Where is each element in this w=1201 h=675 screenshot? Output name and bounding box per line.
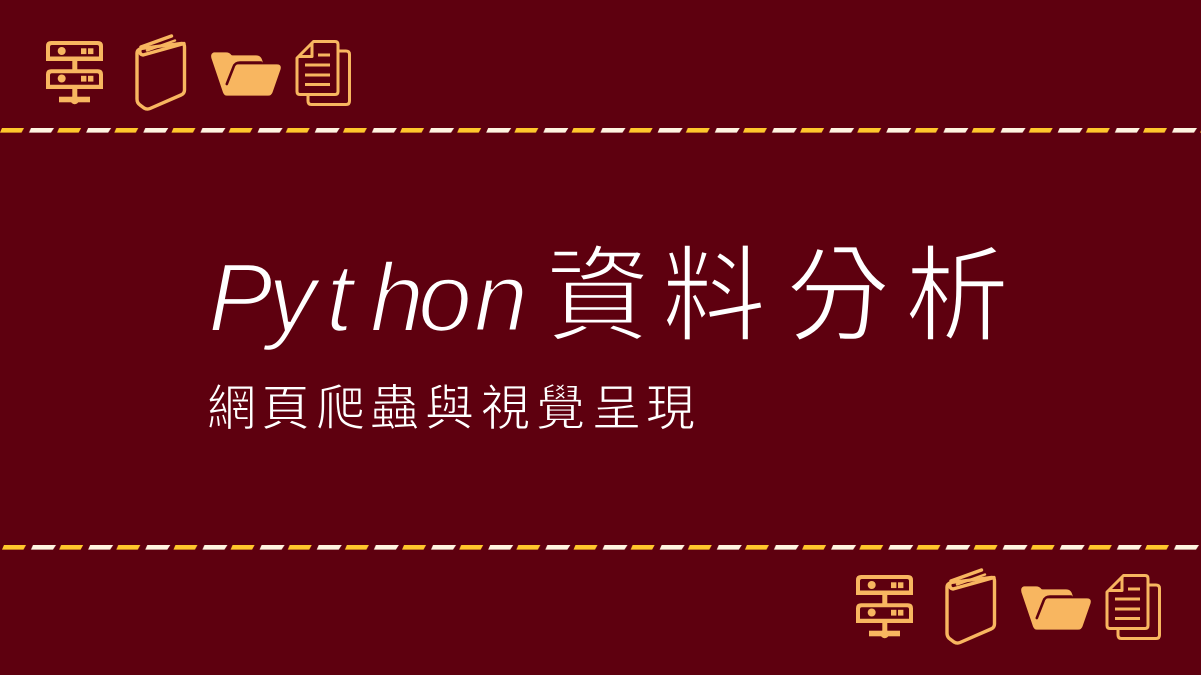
icon: book [137, 36, 184, 109]
icon: documents [297, 42, 350, 104]
icon row: top left [46, 36, 350, 109]
icon: open folder [1022, 587, 1090, 629]
title: Chinese: 資料分析 [546, 211, 1009, 362]
icon row: bottom right [856, 570, 1160, 643]
icon: documents [1107, 576, 1160, 638]
title: Python: Python [208, 243, 528, 352]
icon: open folder [212, 53, 280, 95]
divider: top dashed line [0, 128, 1201, 133]
divider: bottom dashed line [0, 545, 1201, 550]
icon: server [856, 575, 913, 638]
icon: server [46, 41, 103, 104]
subtitle: 網頁爬蟲與視覺呈現 [207, 369, 695, 440]
icon: book [947, 570, 994, 643]
title [208, 211, 1009, 362]
